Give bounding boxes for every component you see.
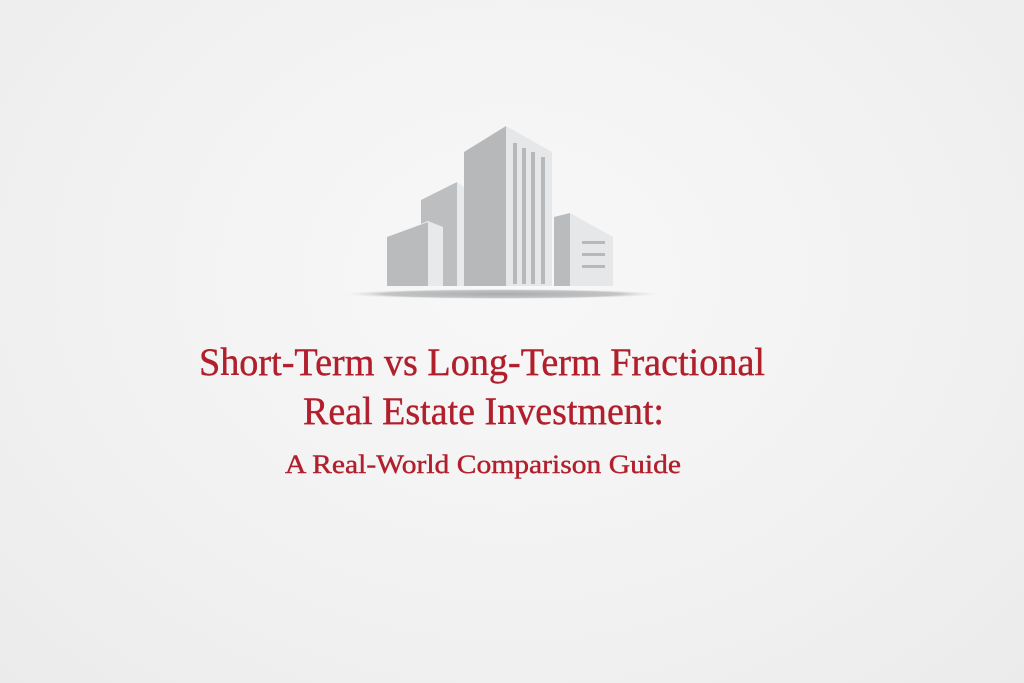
building: left: [387, 221, 443, 286]
icon: city buildings logo: [344, 126, 660, 299]
building: right: [554, 213, 613, 286]
subtitle: A Real-World Comparison Guide: [285, 450, 681, 479]
title: Real Estate Investment:: [303, 390, 664, 433]
building: second: [421, 182, 482, 286]
base ellipse: [344, 289, 660, 299]
title: [199, 341, 765, 479]
title: Short-Term vs Long-Term Fractional: [199, 341, 765, 384]
building: tall tower: [464, 126, 552, 286]
